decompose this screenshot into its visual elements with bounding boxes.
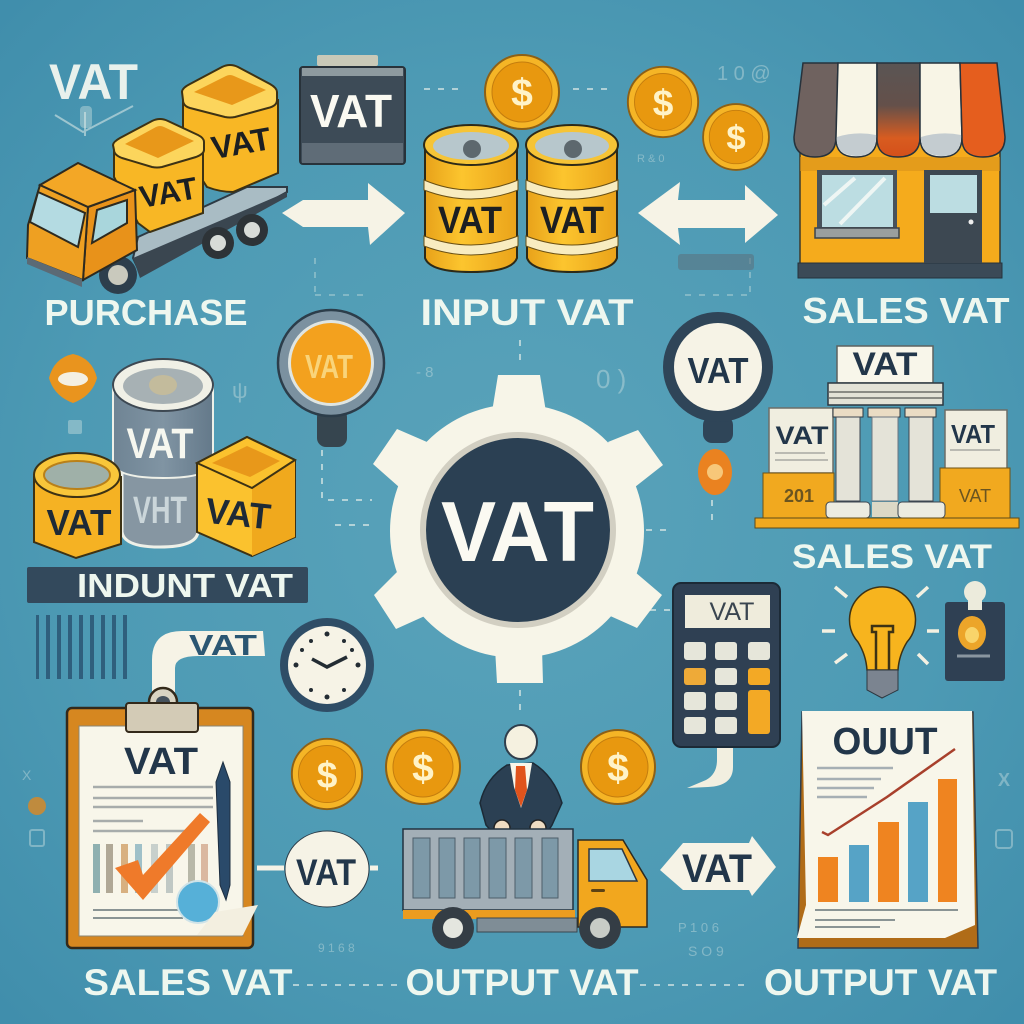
icon: coin bottom 2 (386, 730, 460, 804)
icon: left VAT barrels and crates: VAT (126, 420, 194, 468)
icon: magnifier right: VAT (688, 350, 749, 391)
icon: left VAT barrels and crates: VHT (133, 490, 187, 532)
faint connector lines and decoration: 9 1 6 8 (318, 941, 355, 955)
icon: tag VAT: VAT (189, 630, 257, 662)
faint connector lines and decoration: 1 0 @ (717, 63, 771, 85)
icon: flatbed truck with VAT crates (27, 65, 287, 294)
icon: temple with VAT sign: VAT (852, 346, 918, 382)
icon: left VAT barrels and crates: VAT (46, 502, 112, 543)
icon: coin top right 2 (703, 104, 769, 170)
label: sales VAT bottom: SALES VAT (84, 962, 293, 1003)
icon: magnifier left (278, 310, 384, 447)
icon: clipboard checklist (67, 688, 258, 948)
icon: temple with VAT sign: VAT (776, 422, 828, 450)
icon: VAT document box: VAT (310, 85, 392, 137)
icon: temple with VAT sign: 201 (784, 486, 814, 506)
icon: left VAT barrels and crates: VAT (204, 490, 273, 537)
icon: coin bottom 1 (292, 739, 362, 809)
icon: tag VAT (152, 630, 265, 692)
icon: top-left VAT label (49, 54, 138, 136)
icon: badge (945, 581, 1005, 681)
faint connector lines and decoration: - 8 (416, 364, 434, 381)
icon: input VAT barrels (424, 125, 618, 272)
faint connector lines and decoration: S O 9 (688, 943, 724, 959)
faint connector lines and decoration: P 1 0 6 (678, 920, 719, 935)
icon: output report chart (797, 711, 978, 948)
faint connector lines and decoration: X (998, 770, 1010, 790)
arrow: VAT right-pointing: VAT (682, 847, 752, 891)
icon: input VAT barrels: VAT (438, 200, 502, 242)
icon: temple with VAT sign: VAT (951, 419, 995, 449)
icon: output report chart: OUUT (832, 721, 938, 763)
faint connector lines and decoration: 0 ) (596, 364, 626, 394)
faint connector lines and decoration: ψ (232, 378, 248, 403)
icon: top-left VAT label: VAT (49, 54, 138, 110)
small icon: badge left (49, 354, 97, 403)
label: output VAT right: OUTPUT VAT (764, 962, 997, 1003)
arrow: double headed (638, 182, 778, 245)
label: sales VAT top: SALES VAT (802, 290, 1010, 331)
icon: temple with VAT sign (755, 346, 1019, 528)
icon: VAT oval connector left: VAT (296, 852, 356, 893)
label: sales VAT middle: SALES VAT (792, 538, 992, 576)
icon: light bulb (822, 587, 939, 698)
faint connector lines and decoration: R & 0 (637, 153, 665, 165)
icon: magnifier left: VAT (305, 348, 353, 385)
label: purchase: PURCHASE (44, 292, 248, 333)
icon: flatbed truck with VAT crates: VAT (208, 120, 274, 166)
label: indunt VAT banner (27, 567, 308, 604)
icon: barcode (36, 615, 127, 679)
icon: clipboard checklist: VAT (124, 741, 198, 783)
icon: VAT document box (300, 55, 405, 164)
icon: coin top centre (485, 55, 559, 129)
central gear (373, 375, 663, 683)
icon: input VAT barrels: VAT (540, 200, 604, 242)
arrow: VAT right-pointing (660, 836, 776, 896)
icon: left VAT barrels and crates (34, 359, 295, 558)
icon: magnifier right (663, 312, 773, 495)
icon: delivery truck with businessman (403, 725, 647, 949)
central gear: VAT (441, 485, 594, 580)
icon: coin top right 1 (628, 67, 698, 137)
label: indunt VAT banner: INDUNT VAT (77, 567, 293, 604)
icon: temple with VAT sign: VAT (959, 486, 991, 506)
icon: coin bottom 3 (581, 730, 655, 804)
label: input VAT: INPUT VAT (420, 292, 634, 333)
icon: VAT oval connector left (257, 831, 378, 907)
icon: calculator (673, 583, 780, 788)
icon: wall clock (280, 618, 374, 712)
faint connector lines and decoration: X (22, 767, 32, 783)
icon: flatbed truck with VAT crates: VAT (137, 170, 200, 215)
icon: calculator: VAT (710, 598, 754, 626)
arrow: purchase to input (282, 183, 405, 245)
label: output VAT centre: OUTPUT VAT (406, 962, 639, 1003)
icon: shop (794, 63, 1005, 278)
